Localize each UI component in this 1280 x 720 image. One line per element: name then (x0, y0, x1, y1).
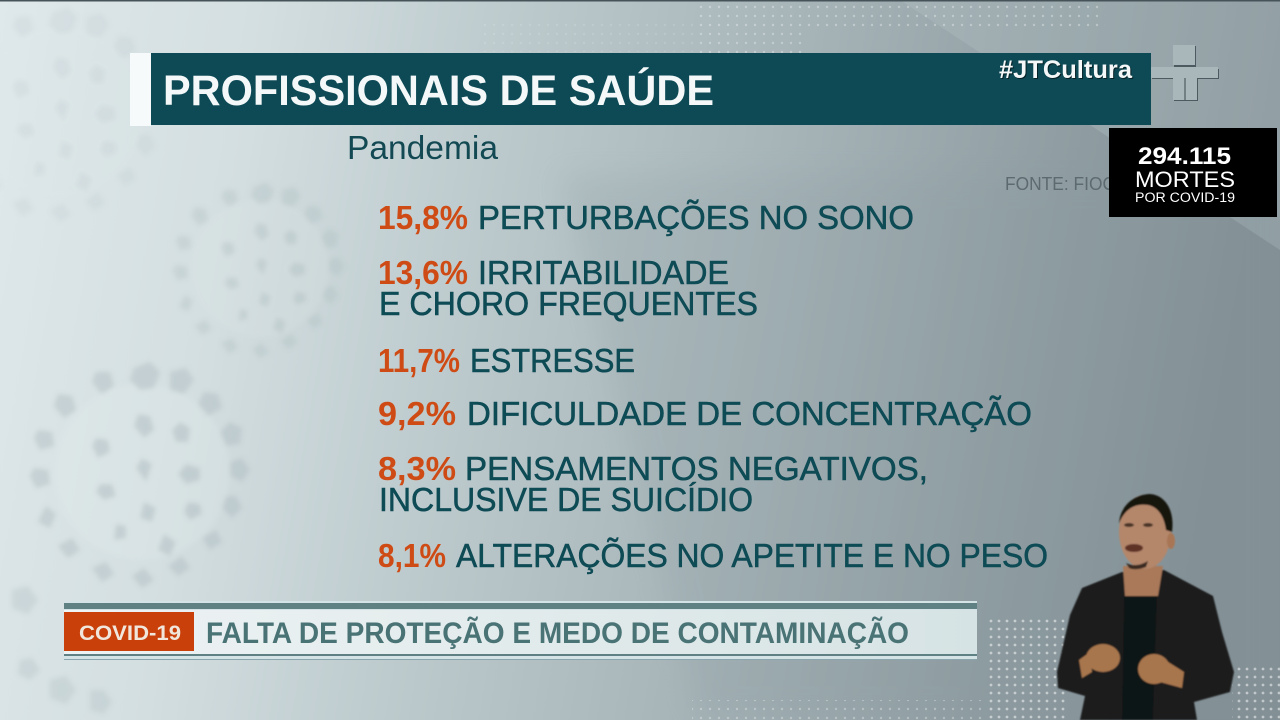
jacket (1057, 570, 1234, 720)
undershirt (1122, 596, 1157, 720)
item: appetite: ALTERAÇÕES NO APETITE E NO PESO (456, 537, 1048, 574)
item: irritability (378, 254, 758, 322)
item: stress: 11,7% (378, 342, 460, 379)
hashtag: #JTCultura (999, 56, 1133, 84)
death counter: POR COVID-19 (1135, 190, 1235, 205)
title banner (130, 53, 1151, 126)
item: concentration: 9,2% (378, 395, 456, 432)
ear (1167, 533, 1175, 549)
head (1119, 495, 1171, 569)
statistics list (378, 199, 1048, 574)
source credit: FONTE: FIOC (1005, 174, 1115, 194)
item: sleep: PERTURBAÇÕES NO SONO (478, 199, 914, 236)
death counter (1109, 128, 1277, 217)
death counter: 294.115 (1138, 143, 1231, 170)
item: sleep: 15,8% (378, 199, 468, 236)
item: negative thoughts (378, 450, 928, 518)
item: irritability: 13,6% (378, 254, 468, 291)
subtitle: Pandemia (347, 129, 499, 166)
item: stress: ESTRESSE (470, 342, 635, 379)
item: appetite: 8,1% (378, 537, 446, 574)
item: negative thoughts: 8,3% (378, 450, 456, 487)
decorative coronavirus illustrations (0, 7, 344, 714)
death counter: MORTES (1135, 167, 1235, 192)
headline: FALTA DE PROTEÇÃO E MEDO DE CONTAMINAÇÃO (206, 616, 909, 650)
face features (1124, 523, 1153, 569)
hair (1119, 494, 1173, 532)
item: stress (378, 342, 635, 379)
right hand (1138, 654, 1184, 688)
item: irritability: IRRITABILIDADE (478, 254, 729, 291)
item: negative thoughts: PENSAMENTOS NEGATIVOS, (465, 450, 928, 487)
tag: COVID-19: COVID-19 (79, 622, 181, 645)
item: concentration: DIFICULDADE DE CONCENTRAÇÃO (467, 395, 1032, 432)
title: PROFISSIONAIS DE SAÚDE (163, 66, 714, 115)
item: negative thoughts: INCLUSIVE DE SUICÍDIO (379, 481, 753, 518)
lower third (64, 601, 977, 660)
left hand (1079, 644, 1120, 678)
neck (1123, 566, 1163, 596)
hashtag: #JTCultura (1000, 57, 1134, 85)
item: irritability: E CHORO FREQUENTES (379, 285, 758, 322)
sign language interpreter (1057, 494, 1234, 720)
icon: TV Cultura logo (1151, 45, 1219, 101)
tag: COVID-19 (64, 612, 194, 651)
